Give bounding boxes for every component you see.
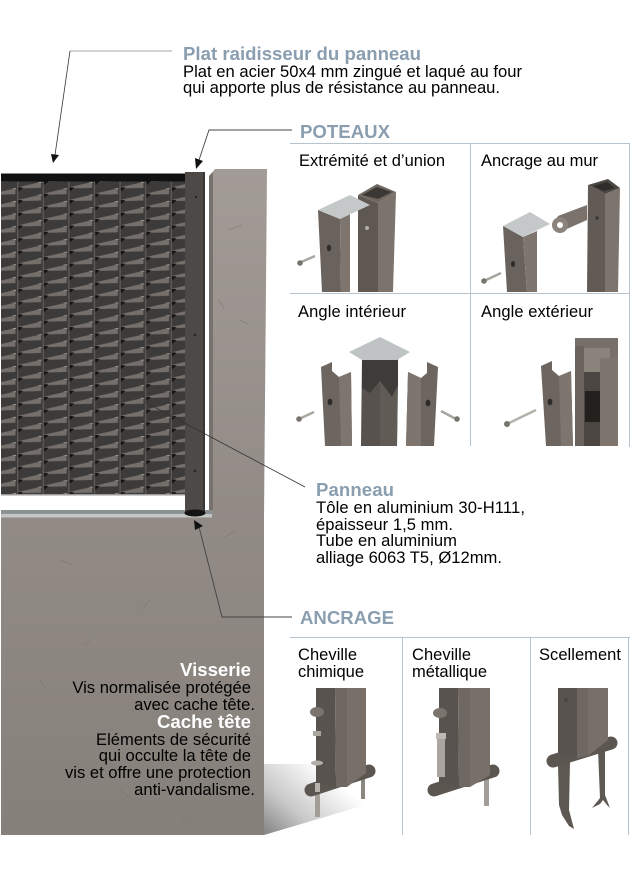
text: visserie and cache tête: qui occulte la tête de (99, 746, 251, 765)
icon: chemical anchor (310, 688, 369, 817)
label: extrémité et d'union: Extrémité et d’union (299, 152, 445, 170)
icon: wall anchor post (481, 179, 620, 292)
label: angle intérieur: Angle intérieur (298, 303, 406, 321)
heading: ancrage: ANCRAGE (300, 607, 394, 628)
arrow: poteaux (195, 130, 292, 169)
text: visserie and cache tête: vis et offre une protection (65, 763, 251, 782)
label: angle extérieur: Angle extérieur (481, 303, 594, 321)
heading: plat raidisseur (183, 43, 522, 97)
label: ancrage au mur: Ancrage au mur (481, 152, 598, 170)
heading: plat raidisseur: Plat en acier 50x4 mm zingué et laqué au four (183, 62, 522, 81)
panel: woven mesh fence panel (1, 173, 186, 496)
label: scellement: Scellement (539, 646, 621, 664)
arrow: ancrage (194, 520, 292, 617)
label: cheville métallique: métallique (412, 663, 487, 681)
sill below panel (1, 510, 212, 518)
arrow: panneau (145, 402, 305, 487)
text: visserie and cache tête (65, 659, 255, 799)
text: panneau: épaisseur 1,5 mm. (316, 515, 453, 534)
text: panneau: Tôle en aluminium 30-H111, (316, 498, 525, 517)
heading: poteaux: POTEAUX (300, 121, 391, 142)
heading: plat raidisseur: qui apporte plus de résistance au panneau. (183, 78, 500, 97)
grid: poteaux (290, 143, 630, 447)
label: cheville chimique: chimique (298, 663, 364, 681)
ground shadow (264, 764, 372, 835)
icon: outer angle post (504, 338, 618, 446)
grid: ancrage (290, 637, 630, 835)
label: cheville métallique (412, 646, 487, 681)
text: panneau (316, 479, 525, 567)
stiffener bar (1, 174, 186, 182)
text: visserie and cache tête: avec cache tête. (134, 695, 255, 714)
text: visserie and cache tête: Visserie (180, 659, 251, 680)
icon: post end and union (297, 184, 396, 292)
text: visserie and cache tête: Eléments de sécurité (96, 730, 251, 749)
text: visserie and cache tête: anti-vandalisme. (134, 780, 255, 799)
fence post (184, 172, 206, 516)
text: panneau: alliage 6063 T5, Ø12mm. (316, 548, 502, 567)
text: visserie and cache tête: Cache tête (157, 711, 251, 732)
icon: inner angle post (296, 337, 460, 446)
label: cheville chimique (298, 646, 364, 681)
text: visserie and cache tête: Vis normalisée protégée (72, 678, 251, 697)
icon: metal anchor (433, 688, 493, 806)
icon: embedded anchor (553, 688, 611, 829)
text: panneau: Panneau (316, 479, 394, 500)
panel: concrete wall (1, 169, 267, 835)
label: cheville chimique: Cheville (298, 646, 357, 664)
text: panneau: Tube en aluminium (316, 531, 457, 550)
label: cheville métallique: Cheville (412, 646, 471, 664)
heading: plat raidisseur: Plat raidisseur du panneau (183, 43, 421, 64)
arrow: plat raidisseur (51, 51, 172, 163)
